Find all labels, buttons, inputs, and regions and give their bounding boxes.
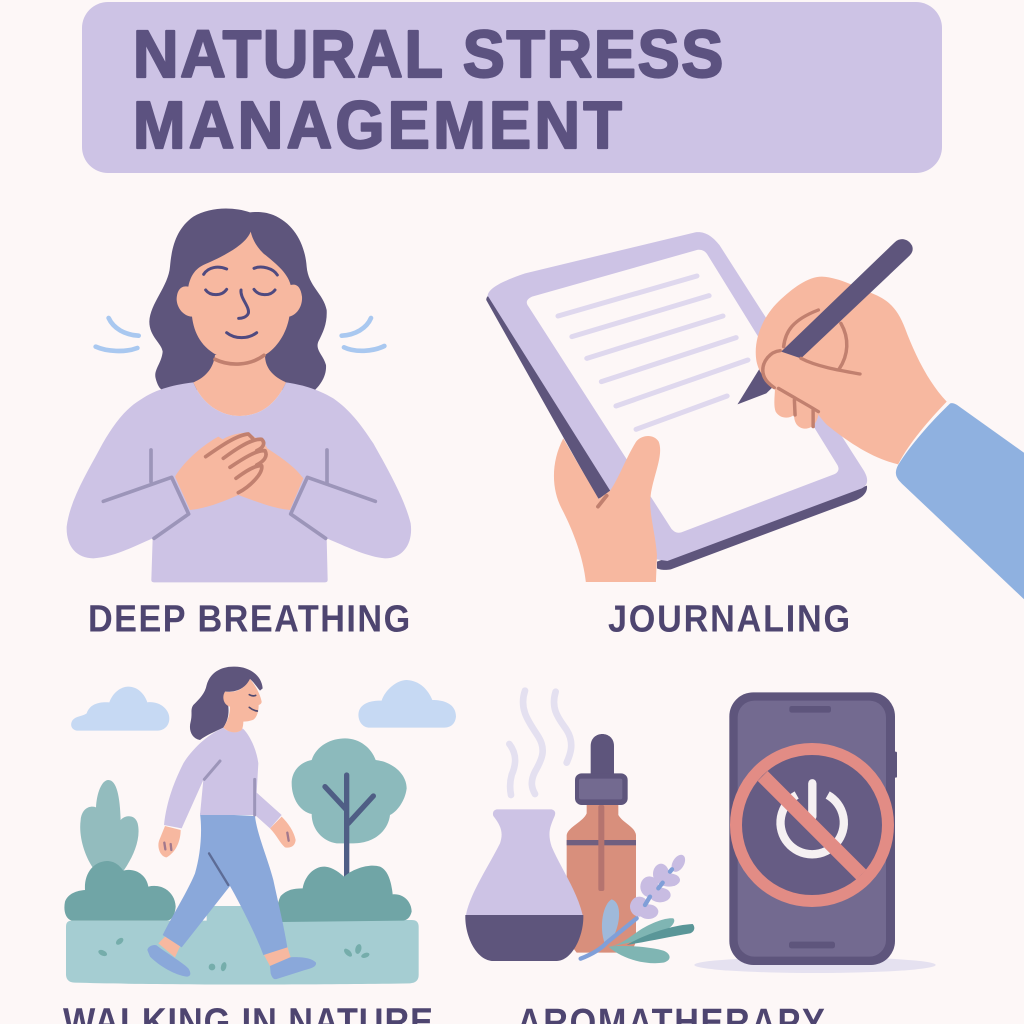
tree crown xyxy=(292,738,407,843)
sweater xyxy=(164,728,282,828)
shirt sleeve xyxy=(896,403,1024,600)
tree trunk xyxy=(325,775,373,877)
neck xyxy=(193,355,286,416)
speaker and home bar xyxy=(789,706,831,713)
panel: journaling illustration xyxy=(486,232,1024,600)
phone shadow xyxy=(694,957,936,973)
title text: NATURAL STRESS xyxy=(133,16,723,91)
right hand xyxy=(756,277,947,464)
sweater xyxy=(67,382,411,582)
panel: walking in nature illustration xyxy=(64,667,456,985)
prohibition disc xyxy=(736,749,888,901)
panel: deep breathing illustration xyxy=(67,209,411,582)
steam xyxy=(509,691,571,795)
label: deep breathing: DEEP BREATHING xyxy=(88,597,410,640)
title banner xyxy=(82,2,942,173)
tablet side edges xyxy=(486,296,867,570)
diffuser vase xyxy=(465,809,583,961)
finger lines xyxy=(206,434,266,493)
ground xyxy=(66,906,419,985)
hands xyxy=(175,433,303,510)
bushes xyxy=(64,861,412,922)
face features xyxy=(204,267,277,338)
face features xyxy=(249,695,257,711)
clouds xyxy=(71,680,456,731)
title text xyxy=(133,16,723,162)
face and neck xyxy=(223,679,262,732)
prohibition sign xyxy=(736,749,888,901)
panel: phone with power-off prohibition xyxy=(694,692,936,973)
finger and thumb creases xyxy=(763,310,860,427)
phone screen xyxy=(738,701,886,957)
stem xyxy=(581,869,672,959)
bottle band xyxy=(567,840,636,845)
power icon xyxy=(780,783,844,854)
tablet body xyxy=(488,232,867,561)
hair xyxy=(149,209,327,390)
thumb crease xyxy=(598,496,607,507)
hands xyxy=(158,817,296,857)
grass tufts xyxy=(97,937,370,972)
face xyxy=(177,232,302,360)
side button xyxy=(893,752,897,778)
shoes xyxy=(147,945,316,979)
label: journaling: JOURNALING xyxy=(608,597,850,640)
clothing fold lines xyxy=(204,761,255,815)
breath lines xyxy=(96,318,384,351)
phone body xyxy=(729,692,895,965)
left hand xyxy=(554,436,660,582)
dropper cap xyxy=(575,773,628,805)
lavender sprig xyxy=(581,852,694,963)
neck crease xyxy=(215,355,264,364)
pen xyxy=(781,239,913,358)
leaves xyxy=(602,899,619,944)
dropper bulb xyxy=(591,734,614,777)
title text: MANAGEMENT xyxy=(133,87,622,162)
bottle body xyxy=(567,804,636,953)
pants xyxy=(163,813,287,955)
pen tip xyxy=(737,369,775,404)
walking woman xyxy=(147,667,316,979)
hair xyxy=(190,667,263,740)
finger marks xyxy=(164,833,289,850)
blossoms xyxy=(630,852,688,919)
page text lines xyxy=(558,276,748,429)
sleeve seams xyxy=(103,450,375,538)
pipette xyxy=(598,805,604,891)
panel: aromatherapy illustration xyxy=(465,691,694,963)
background plant xyxy=(80,780,139,873)
tablet page xyxy=(527,250,839,533)
ankles xyxy=(158,935,291,966)
